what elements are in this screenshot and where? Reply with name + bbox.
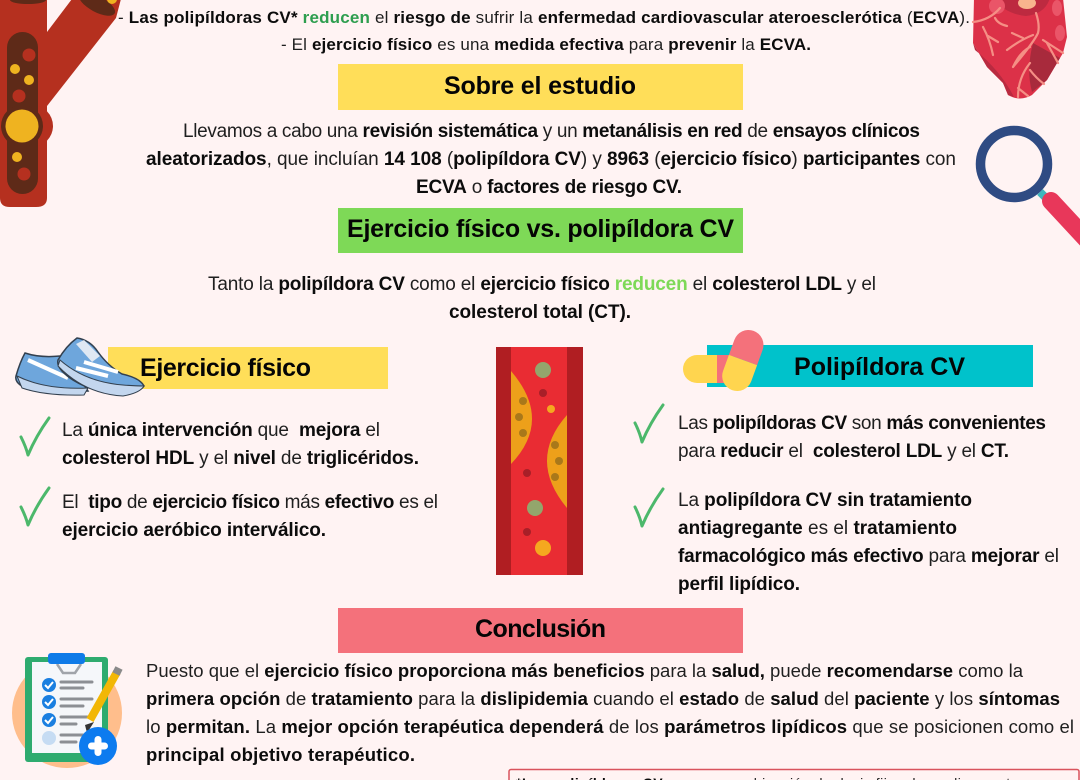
bullet: más convenientes: [678, 413, 1046, 462]
icon: check mark: [635, 489, 663, 526]
icon: clipboard with pencil: [12, 653, 122, 768]
bullet: sin tratamiento antiagregante: La polipíldora CV sin tratamiento: [678, 490, 972, 511]
icon: pills: [683, 326, 768, 395]
panel: polipíldora CV: [635, 326, 1059, 595]
bullet: sin tratamiento antiagregante: antiagregante es el tratamiento: [678, 518, 957, 539]
icon: magnifying glass: [980, 130, 1080, 243]
heading: Ejercicio físico vs. polipíldora CV: Ejercicio físico vs. polipíldora CV: [347, 215, 734, 243]
heading: Conclusión: [338, 608, 743, 653]
icon: check mark: [21, 488, 49, 525]
heading: Ejercicio físico vs. polipíldora CV: [338, 208, 743, 253]
illustration: blood vessel: [496, 347, 583, 575]
bullet: única intervención: La única intervención que mejora el: [62, 420, 380, 441]
text block: about the study: [146, 121, 956, 198]
heading: Polipíldora CV: Polipíldora CV: [794, 353, 965, 381]
bullet: tipo de ejercicio: ejercicio aeróbico interválico.: [62, 520, 326, 541]
panel: ejercicio físico: [16, 338, 438, 541]
text block: about the study: aleatorizados, que incluían 14 108 (polipíldora CV) y 8963 (ejercicio físico) participantes con: [146, 149, 956, 170]
text block: about the study: Llevamos a cabo una revisión sistemática y un metanálisis en red de ensayos clínicos: [183, 121, 920, 142]
text block: about the study: ECVA o factores de riesgo CV.: [416, 177, 682, 198]
heading: Ejercicio físico: Ejercicio físico: [140, 354, 311, 382]
icon: running shoes: [16, 338, 144, 396]
bullet: única intervención: [62, 420, 419, 469]
bullet: tipo de ejercicio: El tipo de ejercicio físico más efectivo es el: [62, 492, 438, 513]
text block: shared effect: colesterol total (CT).: [449, 302, 631, 323]
text block: shared effect: Tanto la polipíldora CV como el ejercicio físico reducen el colesterol LDL y el: [208, 274, 876, 295]
intro text: - El ejercicio físico es una medida efectiva para prevenir la ECVA.: [281, 35, 811, 54]
heading: Ejercicio físico: [108, 347, 388, 389]
bullet: única intervención: colesterol HDL y el nivel de triglicéridos.: [62, 448, 419, 469]
bullet: sin tratamiento antiagregante: [678, 490, 1059, 595]
icon: check mark: [635, 405, 663, 442]
bullet: sin tratamiento antiagregante: perfil lipídico.: [678, 574, 800, 595]
text block: conclusion: [146, 660, 1074, 765]
bullet: tipo de ejercicio: [62, 492, 438, 541]
icon: artery with plaque: [0, 0, 122, 207]
text block: conclusion: Puesto que el ejercicio físico proporciona más beneficios para la salud, puede recomendarse como la: [146, 660, 1024, 681]
heading: Sobre el estudio: Sobre el estudio: [444, 72, 636, 100]
text block: conclusion: principal objetivo terapéutico.: [146, 744, 415, 765]
bullet: más convenientes: Las polipíldoras CV son más convenientes: [678, 413, 1046, 434]
text block: shared effect: [208, 274, 876, 323]
heading: Polipíldora CV: [707, 345, 1033, 387]
icon: check mark: [21, 418, 49, 455]
text block: conclusion: primera opción de tratamiento para la dislipidemia cuando el estado de salud del paciente y los síntomas: [146, 688, 1060, 709]
intro text: [118, 8, 970, 54]
heading: Conclusión: Conclusión: [475, 615, 606, 643]
footnote box: [509, 770, 1079, 780]
icon: heart: [973, 0, 1067, 98]
bullet: más convenientes: para reducir el colesterol LDL y el CT.: [678, 441, 1009, 462]
intro text: - Las polipíldoras CV* reducen el riesgo de sufrir la enfermedad cardiovascular ateroesclerótica (ECVA).: [118, 8, 970, 27]
bullet: sin tratamiento antiagregante: farmacológico más efectivo para mejorar el: [678, 546, 1059, 567]
text block: conclusion: lo permitan. La mejor opción terapéutica dependerá de los parámetros lipídicos que se posicionen como el: [146, 716, 1074, 737]
heading: Sobre el estudio: [338, 64, 743, 110]
